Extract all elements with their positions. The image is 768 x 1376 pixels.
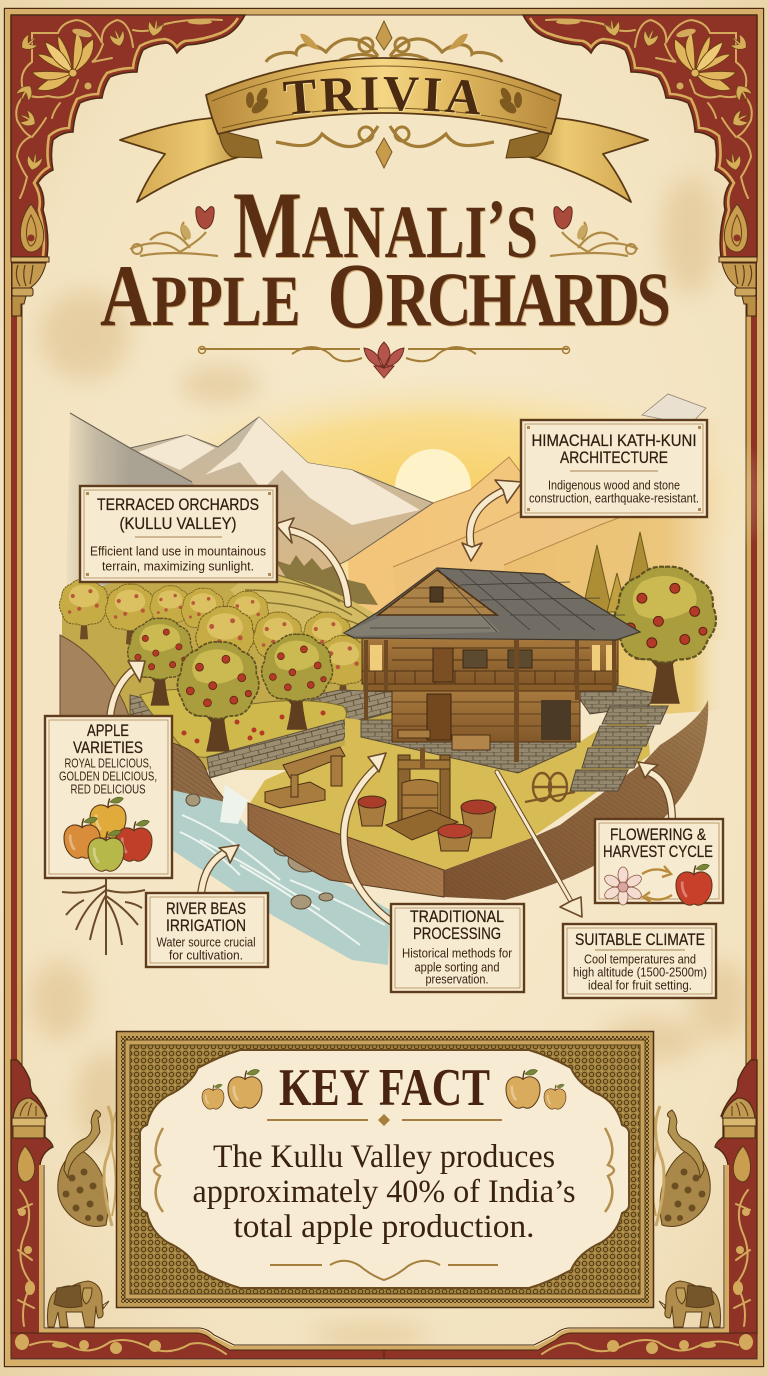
- main title: [100, 174, 669, 378]
- top-left corner ornament: [11, 15, 245, 257]
- fallen apples: [182, 710, 326, 744]
- right elephant: [659, 1281, 720, 1327]
- description: GOLDEN DELICIOUS,: [59, 770, 157, 784]
- stone terrace walls: [207, 720, 346, 778]
- platform soil front: [248, 803, 444, 897]
- description: [402, 946, 512, 986]
- icon: cycle arrows: [642, 866, 672, 902]
- right tail: [510, 118, 648, 202]
- description: for cultivation.: [169, 948, 243, 962]
- heading: TERRACED ORCHARDS: [97, 495, 259, 514]
- ornate frame: [116, 1032, 654, 1308]
- title line two: APPLE: [100, 248, 300, 345]
- right field: [545, 590, 730, 715]
- upper stone wall: [130, 690, 392, 738]
- right peacock: [652, 1106, 710, 1227]
- left tail: [120, 118, 258, 202]
- heading: ARCHITECTURE: [560, 448, 668, 467]
- description: terrain, maximizing sunlight.: [102, 560, 254, 574]
- heading: [410, 907, 504, 943]
- arrow: varieties: [110, 661, 145, 718]
- title line one: MANALI: [233, 174, 487, 278]
- lower ornament: [270, 1261, 498, 1280]
- arrow: architecture double: [462, 480, 522, 561]
- water trough: [265, 747, 345, 808]
- arrow: river: [201, 845, 239, 895]
- platform ground: [250, 700, 650, 870]
- heading: APPLE: [87, 721, 129, 740]
- banner folds: [218, 130, 550, 158]
- description: [529, 478, 699, 506]
- left capital: [11, 257, 49, 316]
- heading: (KULLU VALLEY): [120, 514, 236, 533]
- sky glow: [100, 370, 768, 620]
- description: apple sorting and: [414, 960, 500, 974]
- icon: left gold apples: [202, 1069, 262, 1109]
- title line one: S: [506, 191, 538, 274]
- description: Water source crucial: [156, 936, 256, 950]
- trivia text: TRIVIA: [282, 77, 481, 116]
- heading: [603, 825, 713, 861]
- hills ground: [62, 574, 410, 770]
- label: traditional processing: [391, 904, 524, 992]
- left elephant: [48, 1281, 109, 1327]
- stone stairs: [570, 684, 668, 791]
- key fact text: [192, 1139, 576, 1245]
- river: [172, 785, 390, 965]
- left cliff: [172, 743, 228, 815]
- heading: SUITABLE CLIMATE: [575, 930, 705, 949]
- title divider with lotus: [198, 342, 570, 378]
- heading: [166, 899, 246, 935]
- arrow: climate: [497, 772, 582, 917]
- terraces: [230, 574, 392, 640]
- key fact text: The Kullu Valley produces: [213, 1139, 555, 1175]
- heading: HARVEST CYCLE: [603, 842, 713, 861]
- right cliff: [444, 700, 708, 900]
- description: [573, 952, 707, 992]
- left pillar: [11, 300, 22, 1070]
- big apple tree: [614, 567, 716, 704]
- left tulip ornament: [130, 207, 218, 256]
- description: [59, 756, 157, 796]
- left mountains: [120, 417, 433, 585]
- right tulip ornament: [550, 207, 638, 256]
- right side flourish: [605, 1128, 614, 1212]
- bottom-left ornament: [11, 1060, 384, 1359]
- icon: four apples: [64, 797, 152, 871]
- banner flowers: [246, 86, 522, 116]
- main ribbon: [206, 58, 561, 134]
- description: Cool temperatures and: [584, 952, 696, 966]
- key fact panel: [116, 1032, 654, 1308]
- description: preservation.: [426, 972, 488, 986]
- bottom-right ornament: [384, 1060, 757, 1359]
- right capital: [719, 257, 757, 316]
- label: flowering and harvest cycle: [595, 819, 723, 905]
- label: suitable climate: [563, 924, 716, 998]
- sun: [395, 449, 471, 525]
- description: ROYAL DELICIOUS,: [64, 756, 152, 770]
- right pillar: [746, 300, 757, 1070]
- description: RED DELICIOUS: [70, 782, 146, 796]
- right pine trees: [582, 532, 655, 612]
- description: [90, 544, 266, 574]
- description: Historical methods for: [402, 946, 512, 960]
- forest line: [275, 555, 378, 605]
- heading: FLOWERING &: [610, 825, 707, 844]
- icon: flower: [603, 867, 643, 905]
- title line one: ’: [487, 185, 506, 268]
- top-right corner ornament: [523, 15, 757, 257]
- heading: IRRIGATION: [166, 916, 246, 935]
- kath-kuni house: [344, 568, 640, 773]
- description: [156, 936, 256, 962]
- description: Efficient land use in mountainous: [90, 544, 266, 558]
- description: ideal for fruit setting.: [588, 978, 692, 992]
- heading: [97, 495, 259, 533]
- icon: right gold apples: [506, 1069, 566, 1109]
- cream cartouche: [140, 1050, 629, 1288]
- heading: [532, 431, 696, 467]
- heading: PROCESSING: [413, 924, 501, 943]
- illustration: mountain valley scene: [59, 370, 768, 965]
- label: kath-kuni architecture: [521, 420, 707, 517]
- icon: red apple: [676, 864, 712, 905]
- heading: VARIETIES: [73, 738, 143, 757]
- far right mountains: [348, 410, 735, 640]
- description: high altitude (1500-2500m): [573, 966, 707, 980]
- title line two: O: [327, 246, 386, 348]
- top flourish: [266, 21, 502, 62]
- label: river beas: [146, 893, 268, 967]
- heading: HIMACHALI KATH-KUNI: [532, 431, 696, 450]
- heading: [73, 721, 143, 757]
- cart wheels: [525, 773, 575, 802]
- arrow: flowering: [638, 762, 672, 820]
- key fact text: approximately 40% of India’s: [192, 1174, 576, 1210]
- divider ornament: [378, 1114, 390, 1126]
- label: terraced orchards: [80, 486, 277, 582]
- key fact text: total apple production.: [234, 1209, 534, 1245]
- front apple trees: [128, 618, 333, 752]
- arrow: processing: [344, 753, 392, 922]
- back row apple trees: [59, 579, 369, 699]
- key fact heading: KEY FACT: [279, 1059, 490, 1117]
- title line two: RCHARDS: [386, 257, 669, 341]
- left side flourish: [154, 1128, 163, 1212]
- description: construction, earthquake-resistant.: [529, 492, 699, 506]
- left peacock: [58, 1106, 116, 1227]
- left rock: [60, 635, 130, 720]
- orchard lawn: [140, 690, 346, 757]
- apple baskets: [358, 796, 496, 851]
- trivia banner: [119, 20, 649, 203]
- heading: TRADITIONAL: [410, 907, 504, 926]
- apple press: [386, 748, 458, 840]
- tree roots: [62, 878, 145, 955]
- arrow: terraces: [275, 518, 348, 604]
- description: Indigenous wood and stone: [548, 478, 680, 492]
- heading: RIVER BEAS: [166, 899, 246, 918]
- label: apple varieties: [45, 716, 172, 878]
- river rocks: [186, 794, 333, 909]
- lower flourish: [276, 126, 494, 168]
